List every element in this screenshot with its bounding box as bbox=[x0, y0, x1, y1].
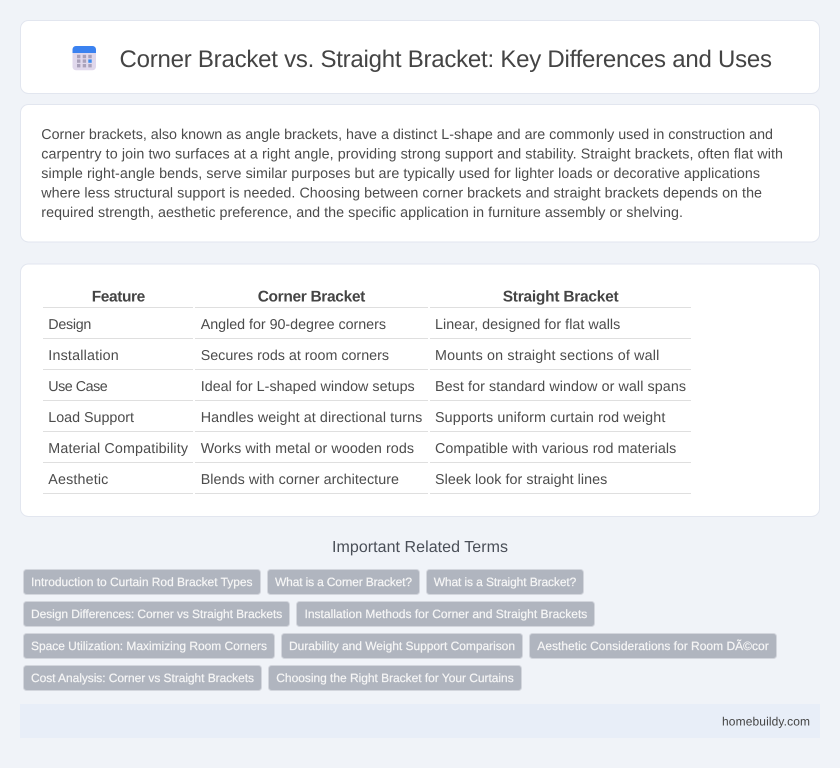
table row: Material Compatibility bbox=[43, 441, 691, 463]
tag: Introduction to Curtain Rod Bracket Types bbox=[31, 575, 252, 589]
footer: homebuildy.com bbox=[722, 714, 810, 728]
footer bbox=[20, 704, 820, 738]
tag bbox=[530, 634, 776, 658]
tag: Aesthetic Considerations for Room DÃ©cor bbox=[537, 639, 769, 653]
table row: Design: Angled for 90-degree corners bbox=[201, 317, 386, 333]
tag bbox=[282, 634, 522, 658]
table row: Installation bbox=[43, 348, 691, 370]
table row: Material Compatibility: Compatible with various rod materials bbox=[435, 441, 676, 457]
tag: What is a Corner Bracket? bbox=[275, 575, 412, 589]
text block: description paragraph: Corner brackets, also known as angle brackets, have a distinct L-shape and are commonly used in construction and bbox=[41, 127, 773, 143]
table row: Load Support bbox=[43, 410, 691, 432]
table row: Design: Design bbox=[48, 317, 91, 333]
text block: description paragraph: carpentry to join two surfaces at a right angle, providing strong support and stability. Straight brackets, often flat with bbox=[41, 146, 783, 162]
heading: related terms: Important Related Terms bbox=[332, 539, 508, 556]
table row: Use Case: Ideal for L-shaped window setups bbox=[201, 379, 415, 395]
tag bbox=[24, 602, 290, 626]
panel: header bbox=[20, 20, 820, 94]
table row: Use Case bbox=[43, 379, 691, 401]
table row: Installation: Mounts on straight sections of wall bbox=[435, 348, 659, 364]
table row: Material Compatibility: Works with metal or wooden rods bbox=[201, 441, 414, 457]
table row: Aesthetic: Blends with corner architecture bbox=[201, 472, 399, 488]
table row: Installation: Secures rods at room corners bbox=[201, 348, 389, 364]
table row: Load Support: Load Support bbox=[48, 410, 134, 426]
table row: Aesthetic: Sleek look for straight lines bbox=[435, 472, 607, 488]
table row: Load Support: Supports uniform curtain rod weight bbox=[435, 410, 665, 426]
text block: description paragraph: required strength, aesthetic preference, and the specific application in furniture assembly or shelving. bbox=[41, 205, 683, 221]
table header row bbox=[43, 289, 691, 308]
table row: Use Case: Use Case bbox=[48, 379, 108, 395]
tag bbox=[24, 666, 262, 690]
icon: calendar bbox=[72, 46, 96, 70]
tag: Choosing the Right Bracket for Your Curtains bbox=[276, 671, 514, 685]
table row: Design bbox=[43, 317, 691, 339]
tag: Durability and Weight Support Comparison bbox=[289, 639, 515, 653]
table row: Aesthetic: Aesthetic bbox=[48, 472, 108, 488]
table header row: Straight Bracket bbox=[503, 289, 619, 306]
table row: Aesthetic bbox=[43, 472, 691, 494]
table header row: Feature bbox=[92, 289, 146, 306]
text block: description paragraph bbox=[40, 127, 783, 221]
table row: Use Case: Best for standard window or wall spans bbox=[435, 379, 686, 395]
table header row: Corner Bracket bbox=[258, 289, 365, 306]
panel: comparison table bbox=[20, 264, 820, 516]
tag bbox=[426, 570, 584, 594]
table row: Load Support: Handles weight at directional turns bbox=[201, 410, 422, 426]
text block: description paragraph: simple right-angle bends, serve similar purposes but are typically used for lighter loads or decorative applications bbox=[41, 166, 760, 182]
title: Corner Bracket vs. Straight Bracket: Key Differences and Uses bbox=[120, 46, 772, 73]
tag: Design Differences: Corner vs Straight Brackets bbox=[31, 607, 282, 621]
tag: Cost Analysis: Corner vs Straight Brackets bbox=[31, 671, 254, 685]
tag: Space Utilization: Maximizing Room Corners bbox=[31, 639, 267, 653]
table row: Installation: Installation bbox=[48, 348, 119, 364]
text block: description paragraph: where less structural support is needed. Choosing between corner brackets and straight brackets depends on the bbox=[40, 186, 762, 202]
tag bbox=[268, 666, 522, 690]
tag bbox=[24, 570, 260, 594]
tag: What is a Straight Bracket? bbox=[434, 575, 577, 589]
tag bbox=[268, 570, 420, 594]
table row: Design: Linear, designed for flat walls bbox=[435, 317, 620, 333]
tag: Installation Methods for Corner and Straight Brackets bbox=[304, 607, 587, 621]
table row: Material Compatibility: Material Compatibility bbox=[48, 441, 189, 457]
panel: description bbox=[20, 104, 820, 242]
tag bbox=[296, 602, 594, 626]
related term tags bbox=[24, 570, 776, 690]
tag bbox=[24, 634, 274, 658]
